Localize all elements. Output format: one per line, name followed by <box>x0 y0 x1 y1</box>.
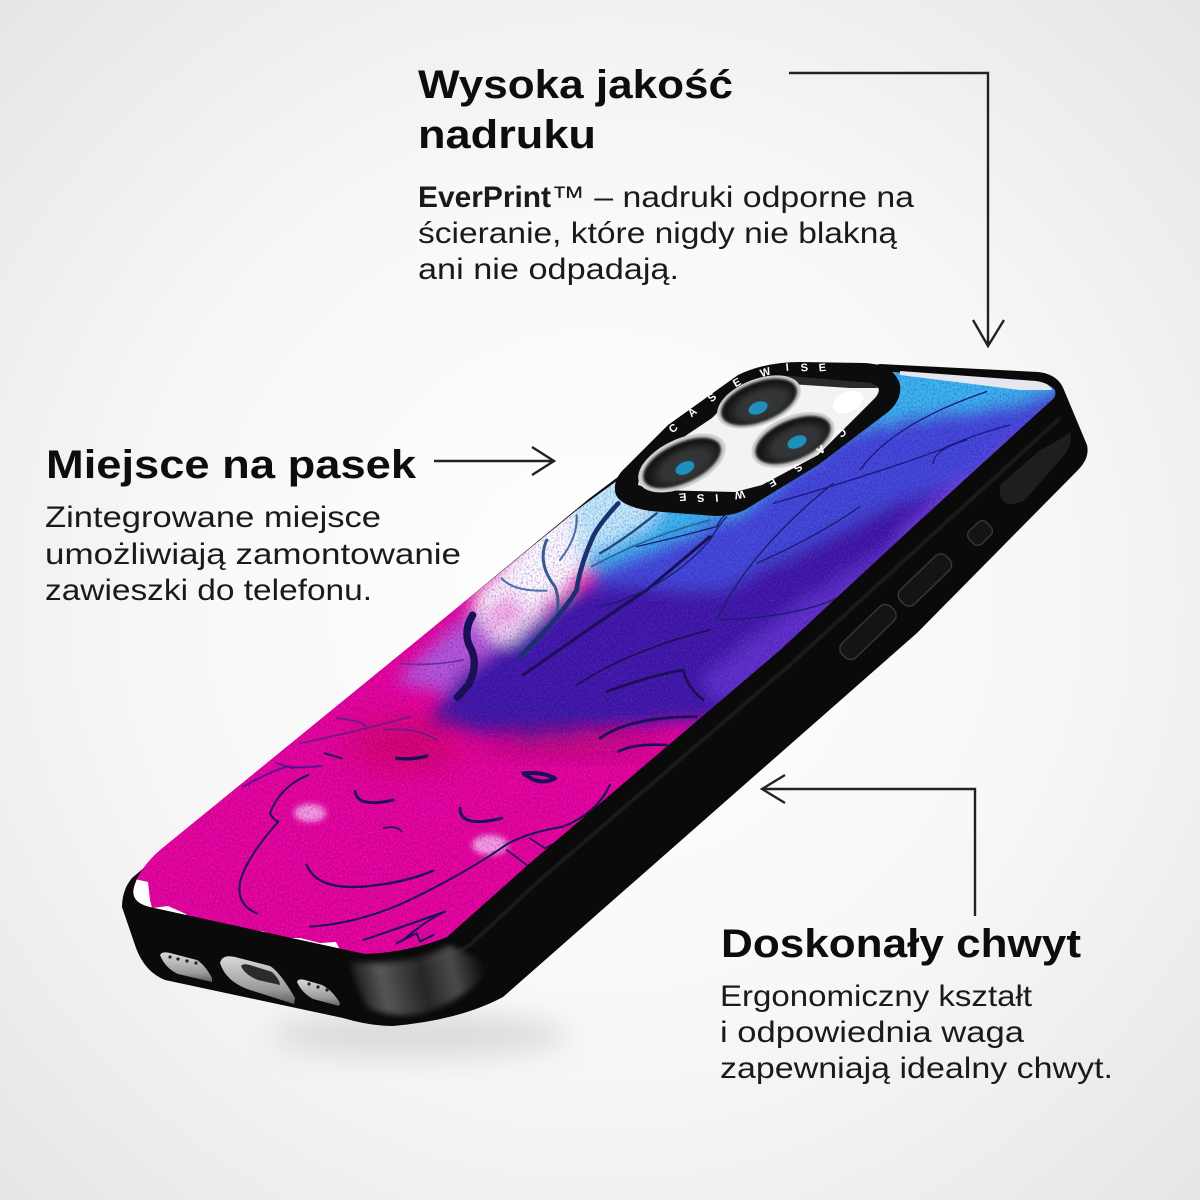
heading: print quality: nadruku <box>418 113 596 157</box>
rim text: CASEWISE <box>667 362 827 436</box>
glossy bottom corner <box>350 945 490 1015</box>
artwork <box>133 372 1056 954</box>
arrow: strap slot <box>434 447 554 475</box>
arrow: print quality <box>789 73 1004 346</box>
text: strap slot: zawieszki do telefonu. <box>45 574 372 607</box>
text: strap slot: Zintegrowane miejsce <box>45 501 381 534</box>
lens: right <box>743 401 843 479</box>
text: print quality: ścieranie, które nigdy nie blakną <box>418 217 897 250</box>
text: grip: Ergonomiczny kształt <box>720 980 1033 1013</box>
camera island <box>615 362 900 516</box>
lens: left <box>629 421 735 505</box>
text: print quality: EverPrint <box>418 181 551 214</box>
top edge reflection <box>900 371 1052 390</box>
text: print quality: ™ – nadruki odporne na <box>551 181 914 214</box>
case body <box>122 364 1088 1026</box>
side bevel <box>372 418 1060 972</box>
rim text lower: CASEWISE <box>678 425 848 504</box>
text: strap slot: umożliwiają zamontowanie <box>45 538 461 571</box>
side buttons <box>837 518 995 663</box>
speaker right <box>297 979 340 1006</box>
glass window <box>638 378 879 492</box>
speaker left <box>160 952 212 982</box>
phone shadow <box>270 1013 570 1057</box>
arrow: grip <box>762 775 975 916</box>
text: grip: zapewniają idealny chwyt. <box>720 1052 1113 1085</box>
lens: top <box>710 365 808 439</box>
phone case <box>100 340 1100 1026</box>
lanyard slot <box>1000 432 1071 504</box>
heading: grip: Doskonały chwyt <box>721 922 1081 966</box>
heading: strap slot: Miejsce na pasek <box>46 443 417 487</box>
charging port <box>220 956 295 1004</box>
window dark reflection <box>760 375 878 388</box>
text: print quality: ani nie odpadają. <box>418 253 679 286</box>
line drawing <box>239 503 710 943</box>
torn white edge <box>133 880 340 948</box>
flash highlight <box>829 386 867 418</box>
text: grip: i odpowiednia waga <box>720 1016 1024 1049</box>
heading: print quality: Wysoka jakość <box>418 63 733 107</box>
